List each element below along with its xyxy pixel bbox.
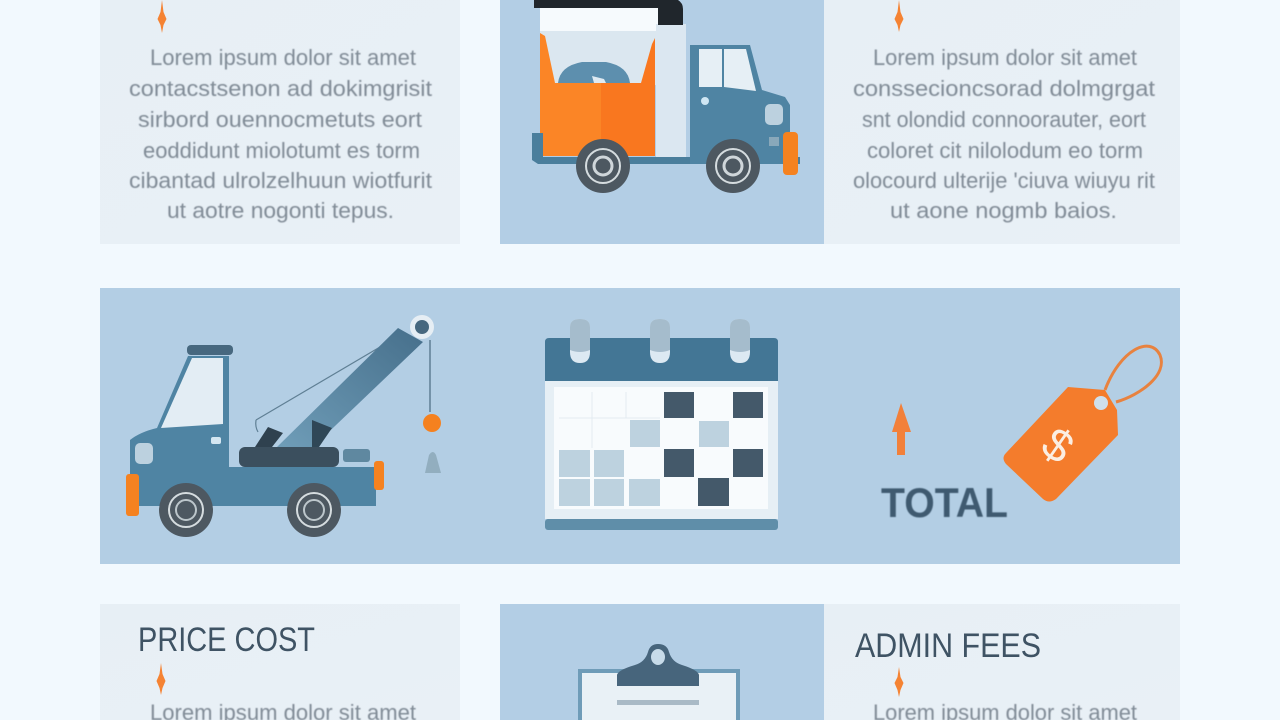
panel: top right text <box>824 0 1180 244</box>
text block: top right body: coloret cit nilolodum eo torm <box>867 138 1143 163</box>
panel: bottom left price cost <box>100 604 460 720</box>
text block: top right body <box>853 45 1155 223</box>
label: total: TOTAL <box>881 479 1008 526</box>
icon: price tag: $ <box>1033 416 1083 474</box>
icon: orange arrow <box>894 0 904 32</box>
icon: tow truck <box>126 315 441 537</box>
icon: up arrow <box>892 403 911 455</box>
icon: price tag <box>1004 346 1161 502</box>
panel: middle band <box>100 288 1180 564</box>
text block: top left body: Lorem ipsum dolor sit amet <box>150 45 416 70</box>
icon: orange arrow <box>156 663 166 695</box>
text block: top right body: Lorem ipsum dolor sit amet <box>873 45 1137 70</box>
heading: admin fees: ADMIN FEES <box>855 627 1041 665</box>
icon: orange arrow <box>158 0 166 33</box>
text block: top left body: sirbord ouennocmetuts eort <box>138 107 422 132</box>
text block: top right body: conssecioncsorad dolmgrgat <box>853 76 1155 101</box>
icon: orange arrow <box>894 667 904 697</box>
text block: top left body: cibantad ulrolzelhuun wiotfurit <box>129 168 432 193</box>
text block: top left body <box>129 45 432 223</box>
text block: top right body: olocourd ulterije 'ciuva wiuyu rit <box>853 168 1155 193</box>
panel: delivery truck image <box>500 0 824 244</box>
icon: delivery truck <box>532 0 800 193</box>
heading: price cost: PRICE COST <box>138 621 315 659</box>
text block: top left body: ut aotre nogonti tepus. <box>167 198 394 223</box>
panel: bottom right admin fees <box>824 604 1180 720</box>
text block: top left body: contacstsenon ad dokimgrisit <box>129 76 432 101</box>
panel: top left text <box>100 0 460 244</box>
text block: top right body: snt olondid connoorauter, eort <box>862 107 1146 132</box>
panel: clipboard image <box>500 604 824 720</box>
icon: clipboard <box>580 644 738 720</box>
text block: top right body: ut aone nogmb baios. <box>890 198 1117 223</box>
icon: calendar <box>545 319 778 530</box>
text block: top left body: eoddidunt miolotumt es torm <box>143 138 420 163</box>
